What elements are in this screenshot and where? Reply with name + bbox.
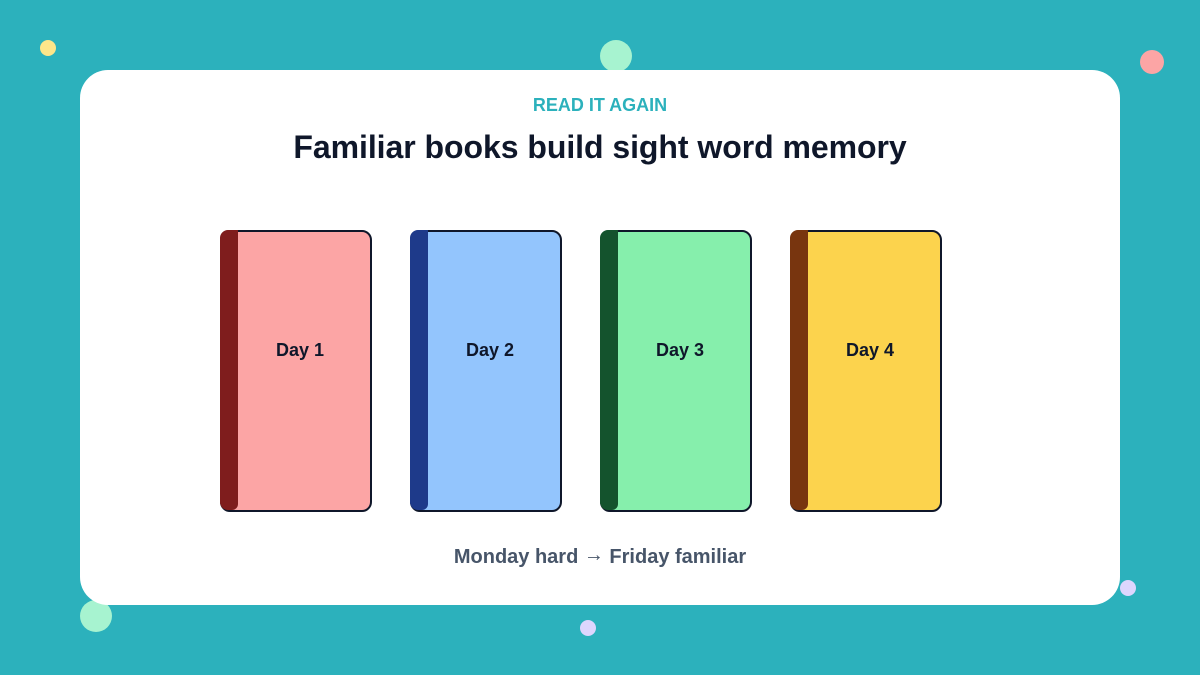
book spine: Day 4 bbox=[790, 230, 808, 510]
title: Familiar books build sight word memory bbox=[293, 129, 907, 165]
book label: Day 1: Day 1 bbox=[276, 340, 324, 360]
book: Day 1 bbox=[220, 230, 372, 512]
book: Day 2 bbox=[410, 230, 562, 512]
decorative dot: mint bottom left bbox=[80, 600, 112, 632]
decorative dot: lavender bottom centre bbox=[580, 620, 596, 636]
panel: white card bbox=[80, 70, 1120, 605]
book spine: Day 3 bbox=[600, 230, 618, 510]
decorative dot: lavender bottom right bbox=[1120, 580, 1136, 596]
eyebrow heading: READ IT AGAIN bbox=[533, 95, 667, 115]
book spine: Day 1 bbox=[220, 230, 238, 510]
decorative dot: coral top right bbox=[1140, 50, 1164, 74]
book spine: Day 2 bbox=[410, 230, 428, 510]
book label: Day 2: Day 2 bbox=[466, 340, 514, 360]
decorative dot: yellow top left bbox=[40, 40, 56, 56]
caption: Monday hard → Friday familiar bbox=[454, 544, 746, 568]
book: Day 4 bbox=[790, 230, 942, 512]
decorative dot: mint top centre bbox=[600, 40, 632, 72]
book: Day 3 bbox=[600, 230, 752, 512]
book label: Day 3: Day 3 bbox=[656, 340, 704, 360]
book label: Day 4: Day 4 bbox=[846, 340, 894, 360]
